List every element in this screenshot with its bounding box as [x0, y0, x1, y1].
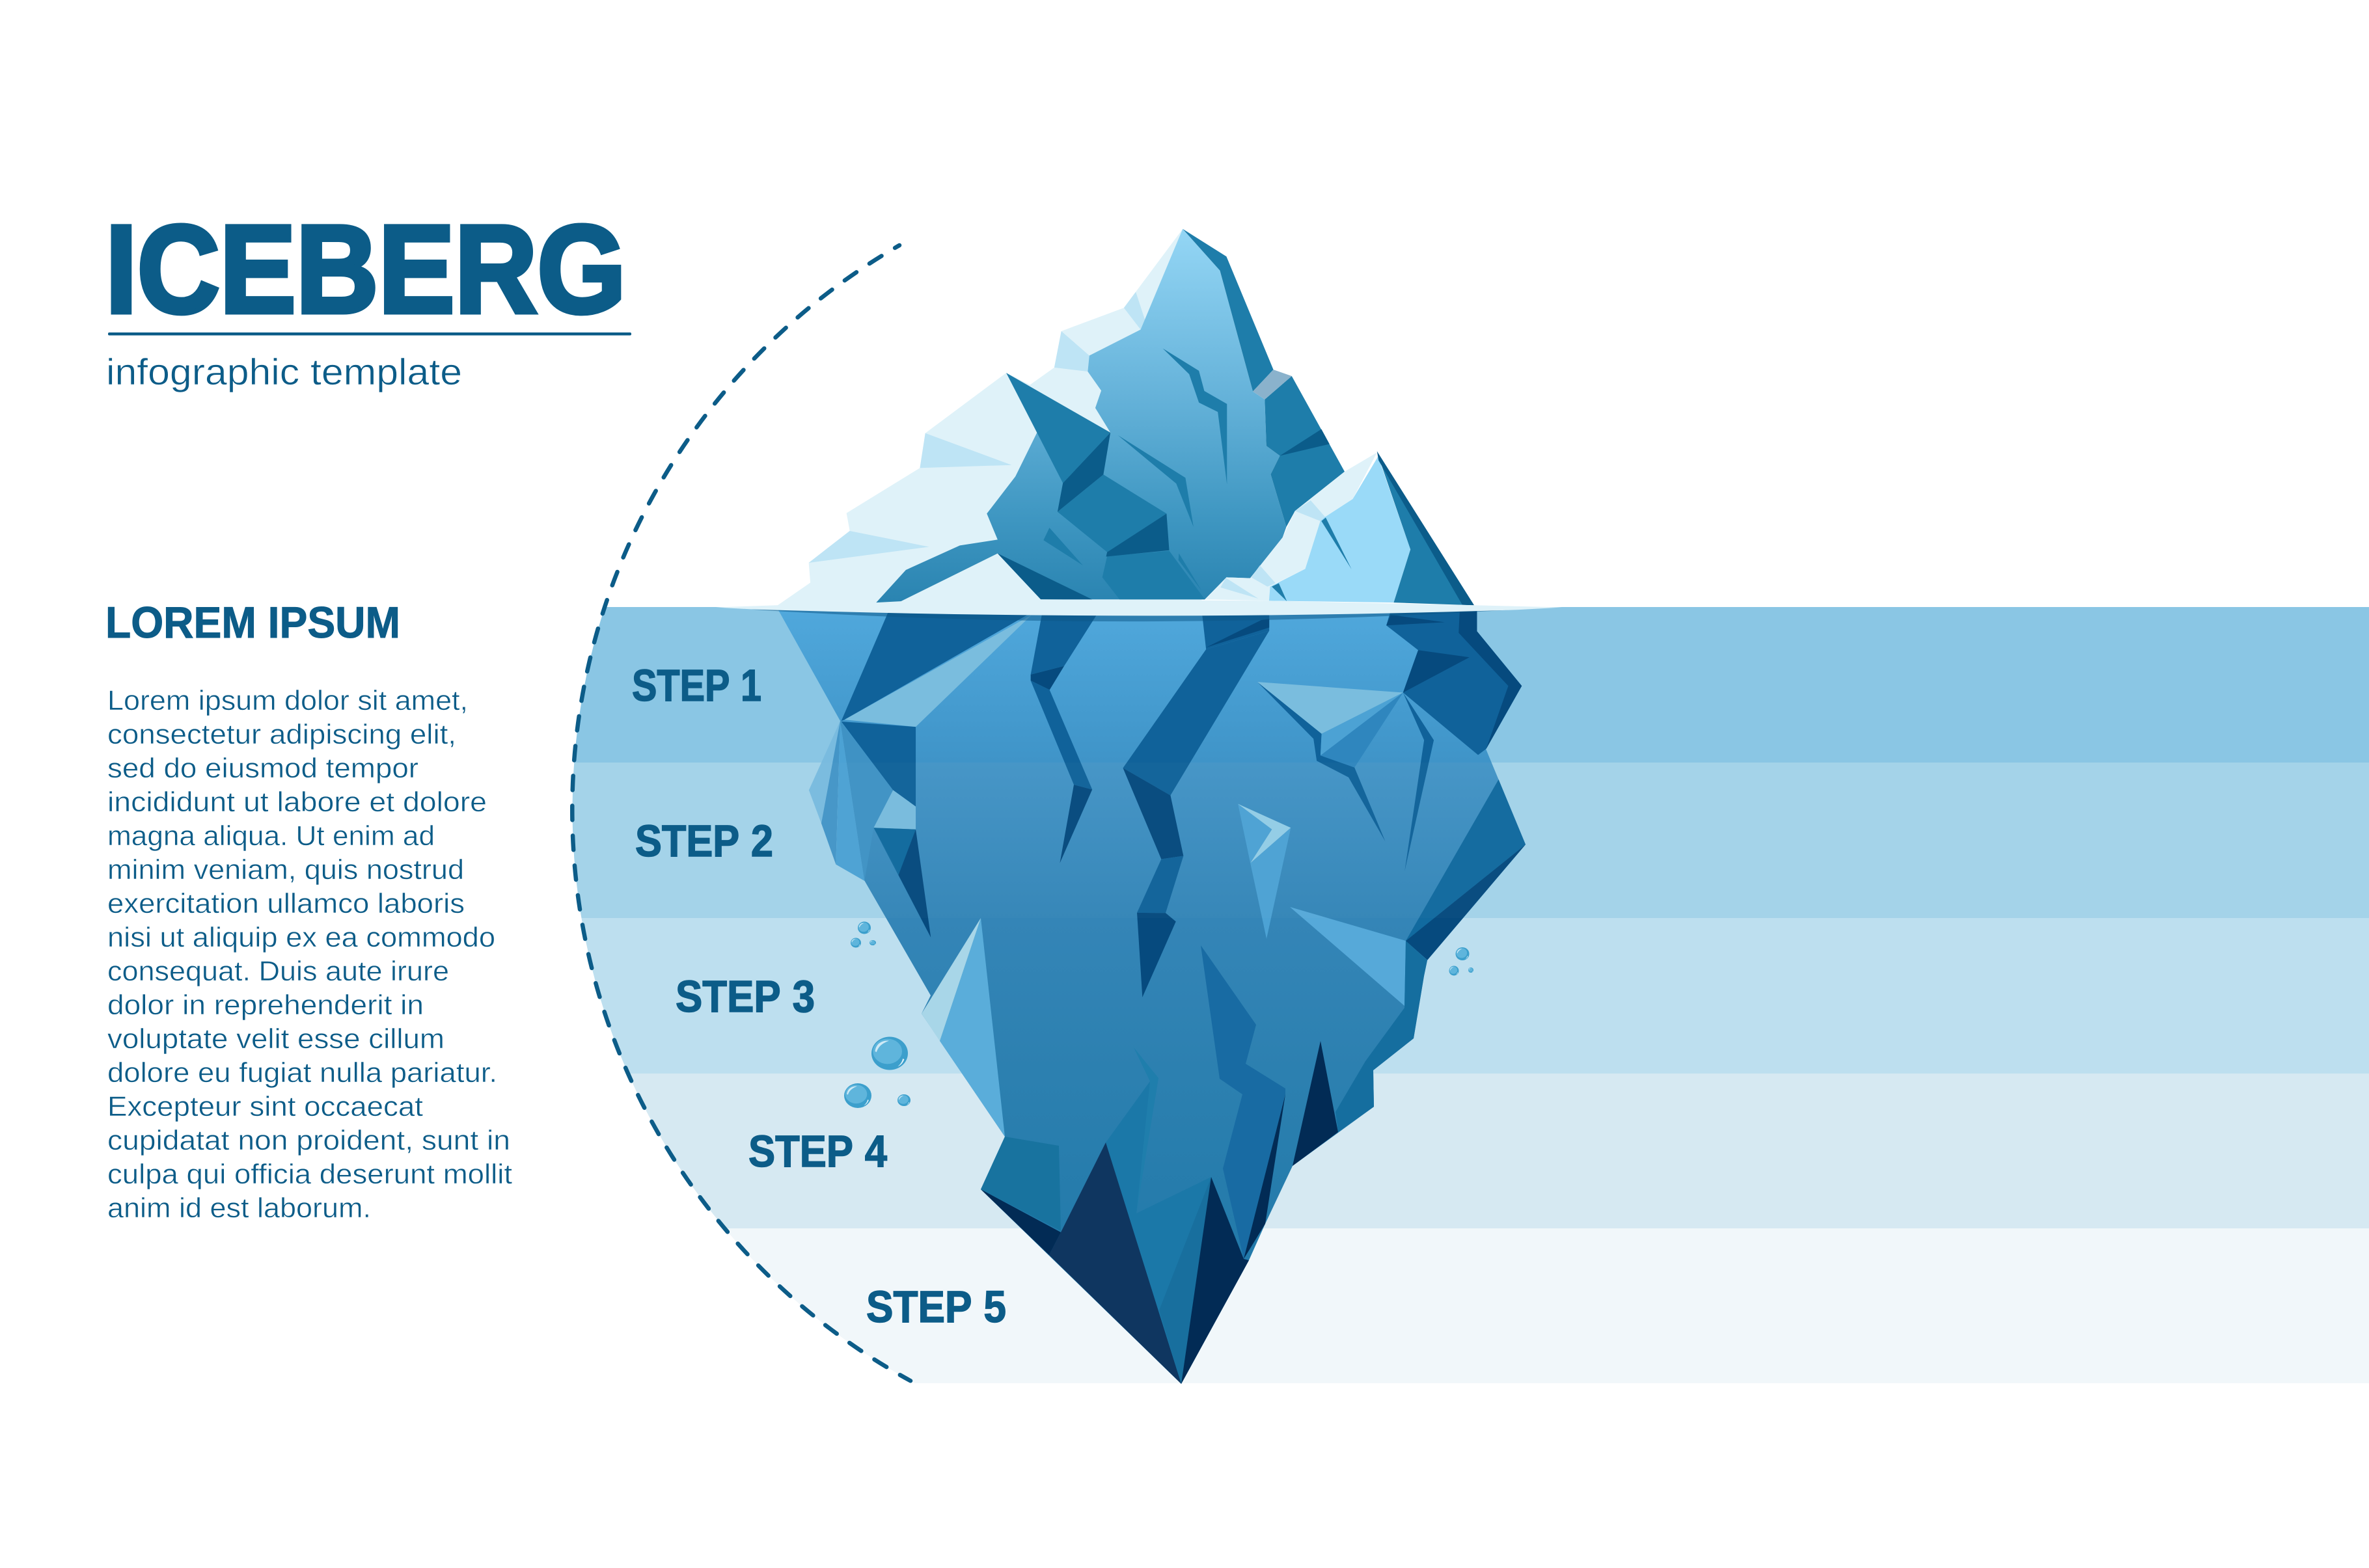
body paragraph: dolore eu fugiat nulla pariatur. — [107, 1057, 497, 1088]
body paragraph: voluptate velit esse cillum — [107, 1023, 445, 1055]
left side lower dark facets — [873, 828, 931, 938]
main submerged body — [778, 609, 1526, 1384]
body paragraph: cupidatat non proident, sunt in — [107, 1125, 510, 1156]
bubbles — [844, 921, 1473, 1108]
upper submerged facets — [809, 611, 1526, 997]
small peak dark edge — [1377, 452, 1474, 605]
mid lower blue facet — [1201, 945, 1285, 1259]
body paragraph: minim veniam, quis nostrud — [107, 854, 464, 885]
tip centre facet — [1159, 1177, 1211, 1384]
body paragraph: Lorem ipsum dolor sit amet, — [107, 685, 468, 716]
body paragraph: nisi ut aliquip ex ea commodo — [107, 922, 495, 953]
body paragraph — [107, 685, 512, 1224]
left side light chip — [873, 790, 916, 830]
front snow accents — [1220, 500, 1326, 599]
small right peak — [1269, 457, 1410, 602]
dashed circle arc — [572, 245, 911, 1381]
step labels: STEP 5 — [866, 1282, 1006, 1332]
iceberg above water — [777, 229, 1474, 606]
small peak shaded side — [1378, 455, 1473, 605]
step labels: STEP 1 — [632, 660, 761, 710]
body paragraph: sed do eiusmod tempor — [107, 753, 418, 784]
tip teal facet — [1106, 1081, 1211, 1384]
right side dark facets — [1406, 779, 1526, 960]
waterline ice sheet — [716, 599, 1562, 615]
water bands — [521, 607, 2369, 1383]
snow accents — [809, 292, 1145, 563]
upper left dark facets — [842, 611, 1034, 807]
peak dark facets — [998, 429, 1330, 599]
body paragraph: consectetur adipiscing elit, — [107, 719, 456, 750]
main peak — [876, 229, 1286, 602]
subtitle: infographic template — [106, 351, 462, 393]
step labels: STEP 4 — [748, 1126, 887, 1176]
teal crack — [1134, 1048, 1158, 1213]
waterline shadow — [751, 610, 1516, 621]
subheading: LOREM IPSUM — [105, 598, 400, 647]
title: ICEBERG — [105, 199, 626, 339]
body paragraph: consequat. Duis aute irure — [107, 956, 449, 987]
front snow between peaks — [1205, 453, 1377, 601]
body paragraph: magna aliqua. Ut enim ad — [107, 820, 435, 852]
left side fan facets — [809, 721, 893, 881]
tip navy facets — [981, 1041, 1338, 1384]
right edge strip — [1335, 941, 1427, 1132]
body paragraph: exercitation ullamco laboris — [107, 888, 465, 919]
body paragraph: culpa qui officia deserunt mollit — [107, 1159, 512, 1190]
upper right dark mass — [1386, 611, 1522, 755]
body paragraph: incididunt ut labore et dolore — [107, 787, 487, 818]
body paragraph: dolor in reprehenderit in — [107, 990, 424, 1021]
translucent ridge facet — [1253, 370, 1292, 399]
band tint over iceberg — [716, 763, 1562, 918]
fan facets right — [1257, 682, 1434, 871]
title underline — [108, 332, 631, 336]
body paragraph: anim id est laborum. — [107, 1193, 371, 1224]
back snow mass — [777, 229, 1201, 606]
step labels: STEP 2 — [635, 816, 773, 866]
small peak cracks — [1272, 518, 1352, 601]
iceberg below water — [778, 610, 1526, 1384]
crack two — [1123, 611, 1269, 997]
body paragraph: Excepteur sint occaecat — [107, 1091, 423, 1122]
step labels: STEP 3 — [676, 971, 815, 1021]
right light facet — [1290, 907, 1406, 1006]
central arrow facet — [1238, 804, 1291, 939]
lower left light facets — [922, 918, 1005, 1137]
peak shaded facets — [1006, 229, 1345, 599]
step labels — [632, 660, 1006, 1332]
crack one — [1031, 611, 1099, 863]
upper left light facet — [845, 615, 1032, 727]
lower left teal block — [981, 1137, 1061, 1231]
